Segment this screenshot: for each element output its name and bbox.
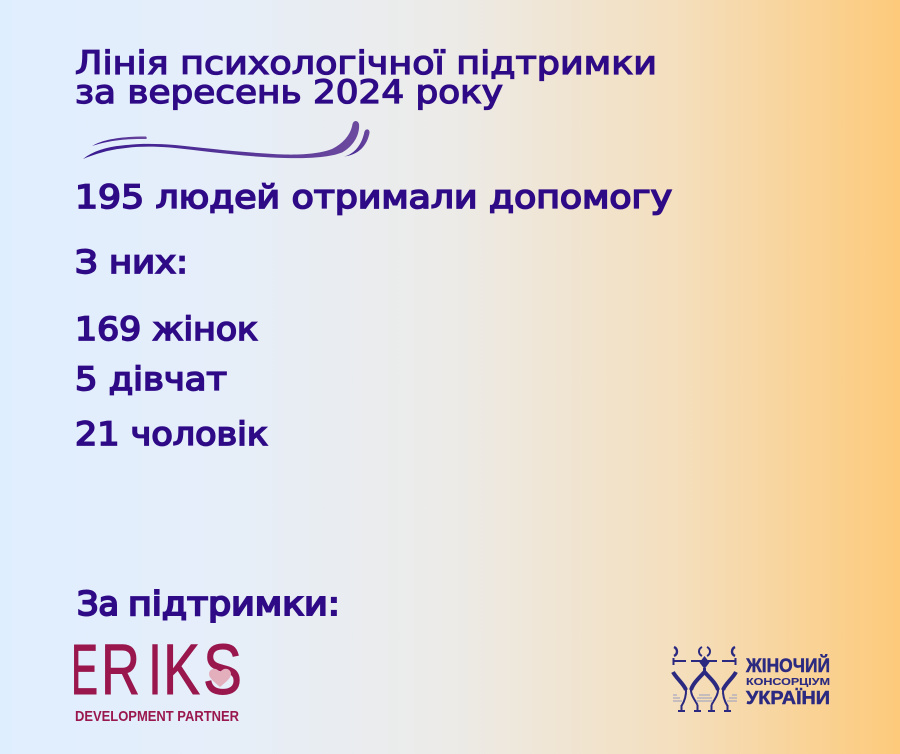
icon: heart in logo (209, 669, 231, 687)
title: за вересень 2024 року (75, 73, 503, 111)
logo: ERIKS Development Partner (71, 631, 242, 725)
men count: 21 чоловік (75, 415, 268, 453)
logo: Women's Consortium of Ukraine: ЖІНОЧИЙ (745, 653, 830, 677)
logo: ERIKS Development Partner: K (163, 631, 200, 710)
icon: three linked figures (673, 647, 737, 711)
logo: ERIKS Development Partner: S (203, 631, 242, 710)
supported by heading: За (77, 584, 119, 623)
women count: 169 жінок (75, 310, 258, 348)
supported by heading: підтримки: (128, 584, 340, 623)
title (75, 44, 657, 111)
title: Лінія психологічної підтримки (75, 44, 657, 82)
logo: Women's Consortium of Ukraine (673, 647, 830, 711)
logo: ERIKS Development Partner: DEVELOPMENT PARTNER (75, 708, 239, 725)
logo: ERIKS Development Partner: I (148, 631, 162, 710)
decorative swoosh under title (83, 121, 370, 159)
total helped: 195 людей отримали допомогу (75, 178, 672, 216)
girls count: 5 дівчат (75, 360, 227, 398)
logo: Women's Consortium of Ukraine: КОНСОРЦІУМ (746, 677, 830, 688)
logo: Women's Consortium of Ukraine: УКРАЇНИ (746, 688, 830, 708)
logo: ERIKS Development Partner: R (101, 631, 140, 710)
logo: ERIKS Development Partner: E (71, 631, 98, 710)
of them heading: З них: (75, 243, 188, 281)
